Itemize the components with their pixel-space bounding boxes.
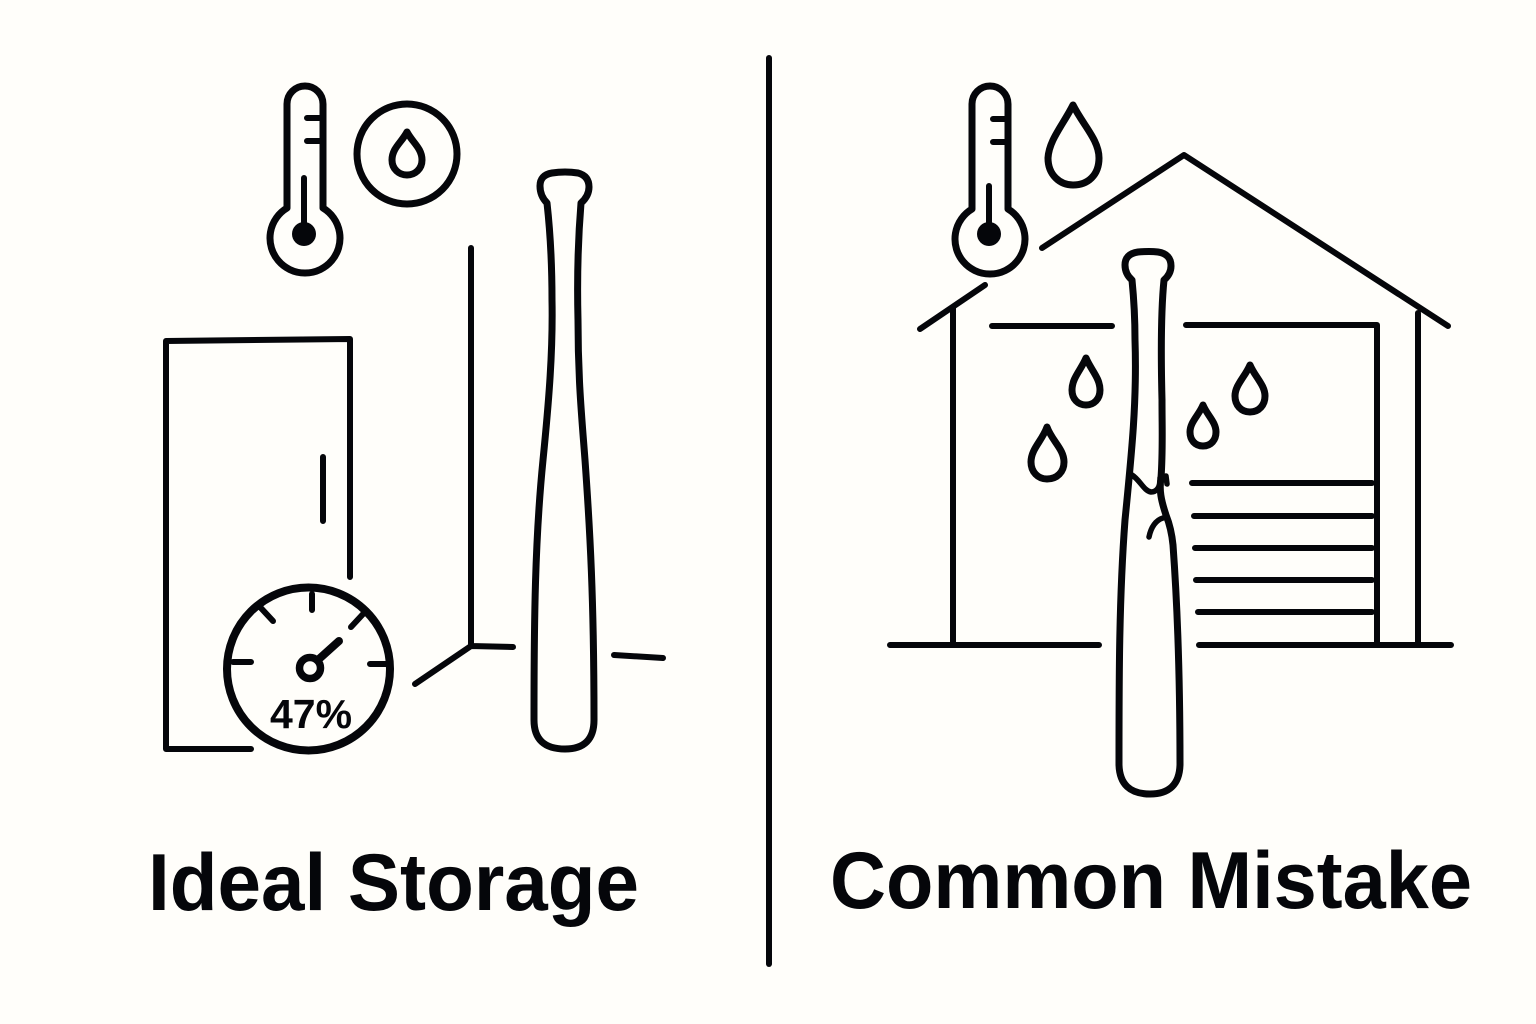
panel: ideal storage bbox=[148, 86, 663, 928]
icon: humidity drop in circle bbox=[357, 104, 457, 204]
falling drops bbox=[1031, 358, 1265, 479]
heading: ideal storage: Ideal Storage bbox=[148, 838, 639, 928]
panel: common mistake bbox=[830, 86, 1472, 926]
garage outline bbox=[890, 155, 1451, 645]
icon: water drop bbox=[1048, 105, 1099, 185]
room corner lines bbox=[415, 248, 663, 684]
heading: common mistake: Common Mistake bbox=[830, 836, 1472, 926]
cabinet bbox=[166, 339, 350, 749]
icon: baseball bat bbox=[534, 172, 594, 749]
center divider bbox=[766, 58, 772, 964]
icon: thermometer bbox=[955, 86, 1025, 274]
icon: thermometer bbox=[270, 86, 340, 273]
hygrometer gauge: 47% bbox=[270, 691, 352, 737]
hygrometer gauge bbox=[227, 588, 390, 750]
icon: cracked baseball bat bbox=[1119, 252, 1180, 794]
garage door slats bbox=[1192, 483, 1372, 612]
